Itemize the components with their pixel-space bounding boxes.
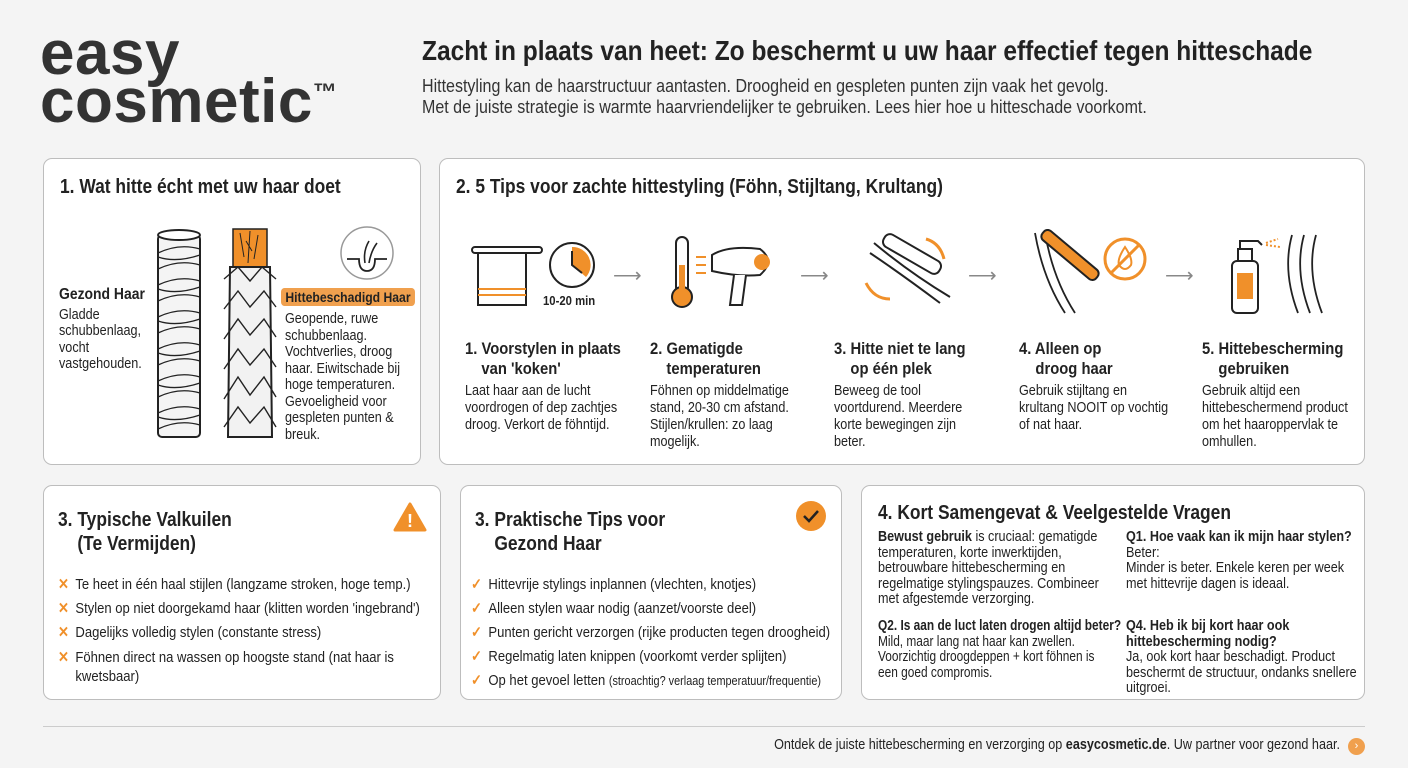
list: tips: Regelmatig laten knippen (voorkomt verder splijten) <box>488 648 787 665</box>
arrow 2: ⟶ <box>800 265 829 287</box>
step 5: gebruiken <box>1218 359 1289 378</box>
subtitle <box>422 76 1147 117</box>
icon: spray bottle <box>1231 234 1323 314</box>
list: pitfalls: Stylen op niet doorgekamd haar (klitten worden 'ingebrand') <box>75 600 420 617</box>
label: damaged hair: Hittebeschadigd Haar <box>285 289 411 305</box>
text: Q4 <box>1126 618 1357 696</box>
icon: thermometer and dryer <box>671 236 770 308</box>
heading: 4. Kort Samengevat & Veelgestelde Vragen <box>878 502 1231 524</box>
list: tips: Punten gericht verzorgen (rijke producten tegen droogheid) <box>488 624 830 641</box>
logo: easy <box>40 19 180 88</box>
text: healthy hair: Gezond Haar <box>59 286 145 303</box>
icon: footer arrow <box>1348 738 1365 755</box>
list: tips: Hittevrije stylings inplannen (vlechten, knotjes) <box>488 576 756 593</box>
icon: follicle circle <box>340 226 394 280</box>
list: pitfalls: ✕ <box>58 600 69 617</box>
icon: check <box>796 501 826 531</box>
text: Q1: Q1. Hoe vaak kan ik mijn haar stylen? <box>1126 529 1352 545</box>
list: pitfalls: Dagelijks volledig stylen (constante stress) <box>75 624 321 641</box>
text: Q1: Minder is beter. Enkele keren per week met hittevrije dagen is ideaal. <box>1126 560 1344 592</box>
text: healthy hair: Gladde schubbenlaag, vocht vastgehouden. <box>59 306 142 372</box>
icon: towel and clock <box>471 242 595 306</box>
step 3: Beweeg de tool voortdurend. Meerdere korte bewegingen zijn beter. <box>834 383 962 450</box>
panel: hair effects <box>43 158 421 465</box>
text: damaged hair: Geopende, ruwe schubbenlaag. Vochtverlies, droog haar. Eiwitschade bij hoge temperaturen. Gevoeligheid voor gespleten punten & breuk. <box>285 311 400 442</box>
icon: straightener moving <box>864 233 950 304</box>
title: Zacht in plaats van heet: Zo beschermt u uw haar effectief tegen hitteschade <box>422 35 1312 66</box>
subtitle: Hittestyling kan de haarstructuur aantasten. Droogheid en gespleten punten zijn vaak het gevolg. <box>422 76 1109 96</box>
heading: 3. Typische Valkuilen <box>58 509 232 531</box>
label: 10-20 min: 10-20 min <box>543 293 595 308</box>
list: pitfalls <box>58 576 420 685</box>
step 2 <box>650 339 789 450</box>
step 4: droog haar <box>1035 359 1113 378</box>
step 3: op één plek <box>850 359 932 378</box>
list: pitfalls: ✕ <box>58 624 69 641</box>
step 2: 2. Gematigde <box>650 339 743 358</box>
list: tips <box>471 576 830 689</box>
list: tips: Alleen stylen waar nodig (aanzet/voorste deel) <box>488 600 756 617</box>
heading: 3. Praktische Tips voor <box>475 509 665 531</box>
text: Q4: Ja, ook kort haar beschadigt. Product beschermt de structuur, ondanks snellere uitgroei. <box>1126 649 1357 696</box>
arrow 3: ⟶ <box>968 265 997 287</box>
step 1 <box>465 339 621 433</box>
icon: warning <box>394 502 427 532</box>
text: summary: Bewust gebruik is cruciaal: gematigde temperaturen, korte inwerktijden, betrouwbare hittebescherming en regelmatige stylingspauzes. Combineer met afgestemde verzorging. <box>878 529 1099 607</box>
subtitle: Met de juiste strategie is warmte haarvriendelijker te gebruiken. Lees hier hoe u hitteschade voorkomt. <box>422 97 1147 117</box>
icon: warning: ! <box>407 511 413 531</box>
step 1: 1. Voorstylen in plaats <box>465 339 621 358</box>
list: pitfalls: ✕ <box>58 576 69 593</box>
icon: straightener no water <box>1034 229 1146 314</box>
text: Q2: Q2. Is aan de luct laten drogen altijd beter? <box>878 618 1121 634</box>
footer: Ontdek de juiste hittebescherming en verzorging op easycosmetic.de. Uw partner voor gezond haar. <box>774 737 1340 753</box>
list: pitfalls: ✕ <box>58 649 69 666</box>
logo: cosmetic™ <box>40 67 337 136</box>
list: tips: ✓ <box>471 624 482 641</box>
step 3 <box>834 339 965 450</box>
heading: (Te Vermijden) <box>77 533 196 555</box>
step 5: 5. Hittebescherming <box>1202 339 1343 358</box>
logo <box>40 19 337 136</box>
step 1: van 'koken' <box>481 359 561 378</box>
text: Q1: Beter: <box>1126 544 1160 560</box>
text: Q4: Q4. Heb ik bij kort haar ook hittebescherming nodig? <box>1126 618 1289 650</box>
panel: summary & FAQ <box>861 485 1365 700</box>
list: tips: ✓ <box>471 600 482 617</box>
list: pitfalls: Föhnen direct na wassen op hoogste stand (nat haar is kwetsbaar) <box>75 649 394 685</box>
list: tips: Op het gevoel letten (stroachtig? verlaag temperatuur/frequentie) <box>488 672 821 689</box>
arrow 4: ⟶ <box>1165 265 1194 287</box>
icon: damaged hair strand <box>224 228 276 438</box>
heading <box>475 509 665 555</box>
step 3: 3. Hitte niet te lang <box>834 339 965 358</box>
heading: Gezond Haar <box>494 533 602 555</box>
step 2: temperaturen <box>666 359 761 378</box>
list: tips: ✓ <box>471 672 482 689</box>
panel: pitfalls <box>43 485 441 700</box>
text: Q2: Mild, maar lang nat haar kan zwellen. Voorzichtig droogdeppen + kort föhnen is een goed compromis. <box>878 634 1094 680</box>
text: Q2 <box>878 618 1121 680</box>
step 4: Gebruik stijltang en krultang NOOIT op vochtig of nat haar. <box>1019 383 1168 433</box>
step 2: Föhnen op middelmatige stand, 20-30 cm afstand. Stijlen/krullen: zo laag mogelijk. <box>650 383 789 450</box>
step 4: 4. Alleen op <box>1019 339 1101 358</box>
step 4 <box>1019 339 1168 433</box>
heading: 1. Wat hitte écht met uw haar doet <box>60 176 341 198</box>
step 5 <box>1202 339 1348 450</box>
step 5: Gebruik altijd een hittebeschermend product om het haaroppervlak te omhullen. <box>1202 383 1348 450</box>
list: pitfalls: Te heet in één haal stijlen (langzame stroken, hoge temp.) <box>75 576 411 593</box>
icon: healthy hair strand <box>157 229 201 438</box>
text: Q1 <box>1126 529 1352 592</box>
panel: 5 tips <box>439 158 1365 465</box>
panel: practical tips <box>460 485 842 700</box>
arrow 1: ⟶ <box>613 265 642 287</box>
list: tips: ✓ <box>471 648 482 665</box>
list: tips: ✓ <box>471 576 482 593</box>
step 1: Laat haar aan de lucht voordrogen of dep zachtjes droog. Verkort de föhntijd. <box>465 383 617 433</box>
icon: footer arrow: › <box>1355 740 1358 752</box>
heading: 2. 5 Tips voor zachte hittestyling (Föhn, Stijltang, Krultang) <box>456 176 943 198</box>
heading <box>58 509 232 555</box>
